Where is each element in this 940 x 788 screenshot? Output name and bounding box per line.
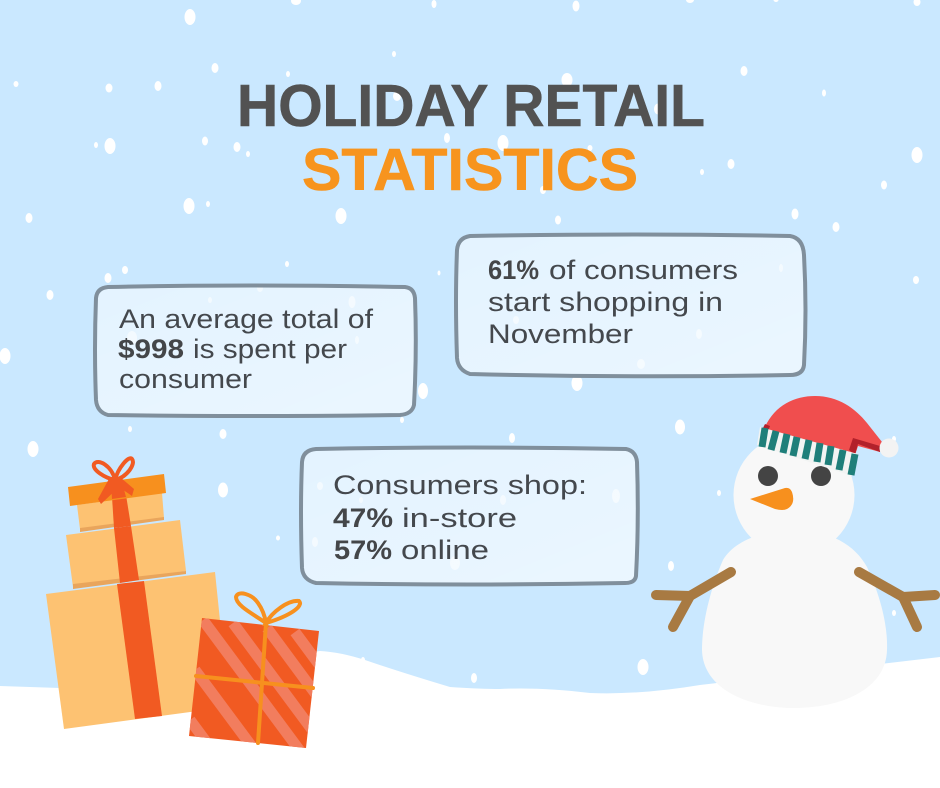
icon: snowman — [656, 396, 935, 708]
left arm — [656, 572, 731, 627]
snowman head — [734, 434, 854, 556]
panel: where consumers shop: 57% — [334, 535, 392, 565]
icon: red striped gift — [189, 591, 319, 748]
panel: November shopping: start shopping in — [488, 287, 723, 317]
panel: average spend: $998 — [118, 334, 184, 364]
panel: average spend: An average total of — [119, 304, 374, 334]
panel: November shopping — [456, 234, 806, 376]
snow ground — [0, 651, 940, 788]
panel: November shopping: November — [488, 319, 633, 349]
title: HOLIDAY RETAIL — [237, 73, 705, 139]
panel: November shopping: of consumers — [549, 255, 738, 285]
panel: where consumers shop: 47% — [333, 503, 393, 533]
panel: where consumers shop: online — [401, 535, 489, 565]
eyes — [758, 466, 831, 486]
panel: average spend: is spent per — [193, 334, 347, 364]
panel: where consumers shop: Consumers shop: — [333, 470, 587, 500]
panel: average spend: consumer — [119, 364, 252, 394]
right arm — [859, 572, 935, 627]
snowman body — [702, 530, 887, 708]
title — [237, 73, 705, 203]
carrot nose — [750, 488, 793, 510]
icon: stacked gift boxes — [46, 458, 222, 729]
panel: where consumers shop — [301, 448, 638, 584]
title: STATISTICS — [302, 137, 638, 203]
panel: where consumers shop: in-store — [402, 503, 517, 533]
santa hat — [757, 396, 898, 476]
panel: average spend — [95, 286, 416, 416]
panel: November shopping: 61% — [488, 255, 539, 285]
